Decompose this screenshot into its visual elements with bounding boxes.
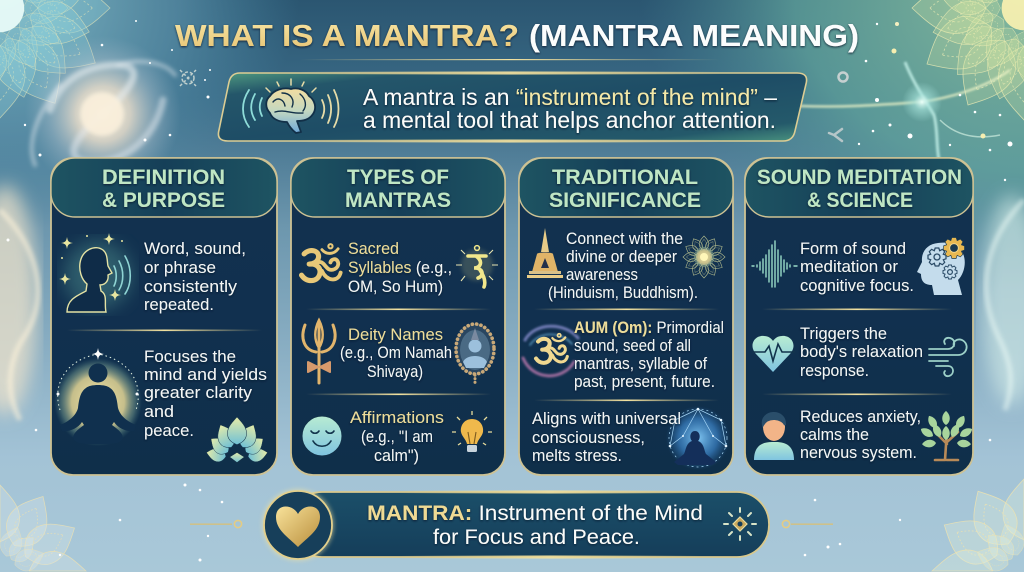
text: AUM xyxy=(574,318,724,391)
text: affirmations: Affirmations xyxy=(350,408,444,427)
icon: tree xyxy=(919,411,974,460)
icon: calm face xyxy=(302,416,342,456)
text: relaxation response: body's relaxation xyxy=(800,342,923,361)
title: WHAT IS A MANTRA? xyxy=(175,18,519,53)
footer text xyxy=(367,502,703,549)
panel: types of mantras xyxy=(291,158,505,475)
text: relaxation response xyxy=(800,324,923,380)
icon: om in cosmic swirl xyxy=(523,326,578,376)
icon: stupa xyxy=(527,228,563,278)
text: form of sound meditation xyxy=(800,239,914,295)
galaxy xyxy=(25,36,181,192)
panel: definition and purpose xyxy=(51,158,277,475)
mandala: bottom right xyxy=(932,479,1024,572)
icon: speaking person xyxy=(59,233,132,312)
text: AUM: past, present, future. xyxy=(574,372,715,391)
banner text: a mental tool that helps anchor attention. xyxy=(363,107,776,133)
panel: sound meditation and science xyxy=(745,158,974,475)
text: aligns: Aligns with universal xyxy=(532,409,681,428)
text: purpose xyxy=(144,347,267,440)
text: purpose: peace. xyxy=(144,421,194,440)
icon: om symbol xyxy=(302,244,341,281)
title xyxy=(175,18,859,53)
text: purpose: Focuses the xyxy=(144,347,236,366)
text: deity names: Shivaya) xyxy=(367,362,423,381)
text: definition: consistently xyxy=(144,277,238,296)
icon: meditating figure xyxy=(54,348,142,446)
title: (MANTRA MEANING) xyxy=(529,18,859,53)
heading: types of mantras: TYPES OF xyxy=(347,166,449,189)
text: reduces anxiety: Reduces anxiety, xyxy=(800,407,921,426)
text: reduces anxiety: calms the xyxy=(800,425,869,444)
text: reduces anxiety xyxy=(800,407,921,462)
text: connect with the divine: Connect with the xyxy=(566,229,683,248)
text: definition: Word, sound, xyxy=(144,239,246,258)
icon: light bulb xyxy=(452,411,492,452)
icon: wind xyxy=(929,338,967,376)
text: affirmations: calm") xyxy=(374,446,419,465)
footer connector: left xyxy=(190,520,242,528)
icon: deity in prayer beads xyxy=(456,324,494,383)
text: purpose: mind and yields xyxy=(144,365,267,384)
icon: golden heart xyxy=(262,489,334,561)
icon: glowing mandala xyxy=(683,236,725,278)
text: purpose: greater clarity xyxy=(144,383,253,402)
text: sacred syllables: OM, So Hum) xyxy=(348,277,443,296)
mandala: top left xyxy=(0,0,113,121)
text: deity names: (e.g., Om Namah xyxy=(340,343,452,362)
text: AUM: AUM (Om): Primordial xyxy=(574,318,724,337)
text: affirmations xyxy=(350,408,444,465)
text: sacred syllables: Sacred xyxy=(348,239,399,258)
text: relaxation response: Triggers the xyxy=(800,324,887,343)
footer text: MANTRA: Instrument of the Mind xyxy=(367,502,703,525)
text: relaxation response: response. xyxy=(800,361,869,380)
icon: sound waveform xyxy=(752,241,797,287)
text: sacred syllables xyxy=(348,239,452,296)
icon: head with gears xyxy=(917,238,965,295)
heading: sound meditation and science: SOUND MEDITATION xyxy=(757,166,962,189)
text: deity names xyxy=(340,325,452,381)
text: form of sound meditation: meditation or xyxy=(800,257,898,276)
heading: sound meditation and science: & SCIENCE xyxy=(807,189,913,212)
icon: brain with sound waves xyxy=(243,79,338,133)
text: form of sound meditation: Form of sound xyxy=(800,239,906,258)
icon: lotus xyxy=(205,417,269,463)
heading: definition and purpose: & PURPOSE xyxy=(102,189,225,212)
heading: definition and purpose: DEFINITION xyxy=(102,166,225,189)
heading: types of mantras xyxy=(291,158,505,217)
icon: meditator in network xyxy=(666,406,730,470)
footer banner xyxy=(262,489,769,561)
heading: types of mantras: MANTRAS xyxy=(345,189,451,212)
text: connect with the divine: awareness xyxy=(566,265,638,284)
text: connect with the divine xyxy=(548,229,698,302)
text: definition: or phrase xyxy=(144,258,216,277)
mandala: top right xyxy=(909,0,1024,123)
text: definition: repeated. xyxy=(144,295,214,314)
text: sacred syllables: Syllables (e.g., xyxy=(348,258,452,277)
text: AUM: mantras, syllable of xyxy=(574,354,707,373)
text: definition xyxy=(144,239,246,314)
text: aligns xyxy=(532,409,681,465)
heading: traditional significance: TRADITIONAL xyxy=(552,166,698,189)
icon: heart with pulse xyxy=(752,336,795,372)
banner text: A mantra is an “instrument of the mind” – xyxy=(363,84,777,110)
decorative sparkle icons xyxy=(180,70,848,141)
icon: sun emblem xyxy=(724,508,756,540)
icon: calm person xyxy=(754,413,794,460)
text: purpose: and xyxy=(144,402,174,421)
footer text: for Focus and Peace. xyxy=(433,526,640,549)
definition banner xyxy=(218,72,807,142)
text: aligns: consciousness, xyxy=(532,428,645,447)
text: aligns: melts stress. xyxy=(532,446,622,465)
text: affirmations: (e.g., "I am xyxy=(361,427,433,446)
heading: sound meditation and science xyxy=(745,158,973,217)
heading: definition and purpose xyxy=(51,158,277,217)
text: deity names: Deity Names xyxy=(348,325,443,344)
footer connector: right xyxy=(782,520,833,528)
text: connect with the divine: divine or deeper xyxy=(566,247,677,266)
heading: traditional significance: SIGNIFICANCE xyxy=(549,189,701,212)
text: connect with the divine: (Hinduism, Buddhism). xyxy=(548,283,698,302)
heading: traditional significance xyxy=(519,158,733,217)
banner text xyxy=(363,84,777,133)
mandala: bottom left xyxy=(0,485,86,572)
icon: trident with damaru xyxy=(303,320,335,383)
panel: traditional significance xyxy=(519,158,733,475)
light beams xyxy=(165,62,1010,160)
text: reduces anxiety: nervous system. xyxy=(800,443,917,462)
text: form of sound meditation: cognitive focus. xyxy=(800,276,914,295)
icon: sanskrit syllable xyxy=(456,246,498,287)
text: AUM: sound, seed of all xyxy=(574,336,691,355)
